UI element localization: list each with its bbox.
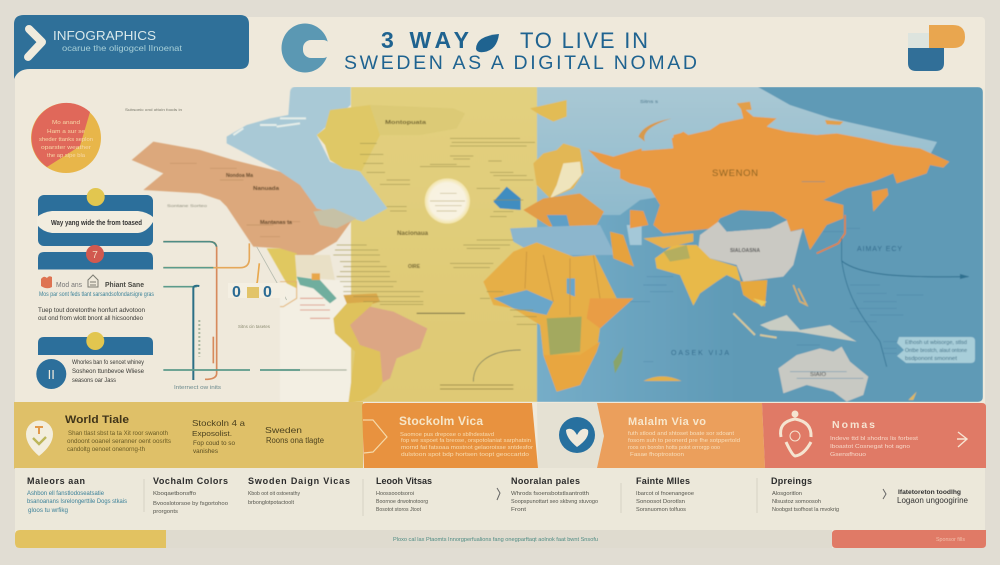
connector lines chart	[163, 242, 300, 380]
small islands	[643, 376, 682, 381]
info column 3: brbonglotpotactoolt	[248, 500, 294, 506]
South America	[333, 302, 383, 403]
yellow panel: World Tiale: Sweden	[265, 425, 302, 435]
pie circle	[31, 103, 101, 173]
title: 3 WAY	[381, 27, 469, 53]
info column 2: Bvooslotorsoe by fsgortohoo	[153, 501, 228, 507]
map labels: Nondoa Ma	[226, 173, 253, 179]
icon row	[41, 275, 144, 289]
info column 6: Sorsnuomon tolfuos	[636, 507, 686, 513]
arctic sea	[227, 87, 387, 222]
body text	[38, 307, 145, 322]
Australia	[778, 347, 868, 402]
red badge	[86, 245, 104, 263]
pie circle: Mo anand	[52, 120, 80, 126]
number counters: 0	[263, 284, 272, 301]
map labels: Nacionaua	[397, 230, 428, 237]
chevron divider	[883, 489, 886, 499]
map labels: Nanuada	[253, 186, 279, 192]
card 3	[36, 332, 153, 389]
light orange panel: Malalm Via: futh stlood and shtoset boate sor sdoant	[628, 431, 734, 437]
icon: leaf	[476, 34, 499, 52]
yellow panel: World Tiale: candoltg oenoet onenorng-th	[67, 447, 145, 453]
Indonesia	[733, 313, 777, 338]
title logo: letter C	[282, 24, 331, 72]
grey gap with icon	[537, 403, 604, 468]
North America	[132, 142, 353, 255]
map labels: OASEK VIJA	[671, 350, 729, 357]
Lake Mongolia	[732, 212, 788, 232]
yellow panel: World Tiale: Fop coud to so	[193, 441, 236, 447]
western hemisphere map	[132, 87, 642, 403]
info column 2	[153, 476, 228, 515]
info column 7: Dpreings	[771, 476, 812, 486]
map labels: Mantanas ta	[260, 220, 292, 226]
route arrow	[842, 261, 968, 277]
number counters	[228, 283, 285, 301]
India	[655, 245, 741, 306]
map labels: SWENON	[712, 168, 758, 179]
map labels: Sitns s	[640, 99, 659, 104]
info column 1: Ashbon ell fanstlodoseatsatie	[27, 491, 105, 497]
icon: chevron	[28, 29, 42, 57]
red panel: Nomas: Gsensfhouo	[830, 452, 866, 458]
teal note: Mos par sont feds tlant sarsandsofondarsigre gras	[39, 292, 154, 298]
red panel: Nomas	[762, 403, 986, 468]
Kamchatka	[872, 188, 888, 212]
footer tag: Sponsor fills	[936, 537, 966, 543]
orange panel: Stockolm Vica: fop we sspoet fa breose, orspotolaniat sarphatsin	[401, 438, 531, 444]
title	[344, 27, 697, 74]
Hudson patch	[313, 208, 357, 228]
pie circle: Ham a sur se	[47, 129, 85, 135]
info column 3	[248, 476, 350, 506]
icon: orange bag	[41, 276, 52, 288]
Russia west	[588, 148, 642, 170]
info column 5: Front	[511, 507, 527, 513]
map labels: OIRE	[408, 264, 420, 270]
Iberia blue	[493, 187, 521, 210]
Middle East bands	[643, 233, 693, 248]
China	[698, 220, 803, 282]
banner subtitle: ocarue the oligogcel lInoenat	[62, 43, 183, 53]
info column 5: Nooralan pales	[511, 476, 580, 486]
Mediterranean	[510, 225, 615, 255]
light orange panel: Malalm Via: roos on borobn hotts poiot orrorgp ooo	[628, 445, 720, 451]
red panel: Nomas: Indeve ttd bl shodns lis forbest	[830, 436, 919, 442]
card 3: II	[48, 367, 55, 382]
card 1	[37, 188, 153, 246]
Scandinavia	[533, 143, 584, 198]
pie circle: the ap sipe bla	[47, 153, 86, 159]
info column 7: Noobgst tsofhost la mvokrig	[772, 507, 839, 513]
info column 4: Hoossoootsoroi	[376, 491, 414, 497]
map labels: Sontane Sorteo	[167, 203, 208, 208]
footer bar	[15, 530, 986, 548]
info column 1: gloos tu wrfikg	[28, 508, 68, 514]
map callout box: Ontbe brostch, alaut ontone	[905, 348, 967, 354]
Central America patches	[267, 248, 297, 288]
info column 4: Leooh Vitsas	[376, 476, 432, 486]
body text: out ond from wlott bnont all hicsoondeo	[38, 315, 143, 322]
card text: Whorles ban fo sencet whiney	[72, 359, 145, 366]
footer note: Ploxo cal lax Ptaomts Innorgperfualions fang onegparftaqt aolnok faat bwnt Snsofu	[393, 537, 598, 543]
info column 2: Kboqaetbonsffo	[153, 491, 196, 497]
Arctic islands	[737, 102, 843, 125]
red panel: Nomas: Iboastot Cosnegat hot agno	[830, 444, 910, 450]
info column 4	[376, 476, 432, 513]
info column 7: Alosgoritlon	[772, 491, 802, 497]
header banner	[14, 15, 249, 79]
chart small label: Sitns cin tasetes	[238, 324, 271, 329]
Madagascar	[613, 347, 623, 373]
light orange panel: Malalm Via: Malalm Via vo	[628, 416, 706, 428]
chart caption: Internect ow inits	[174, 385, 221, 391]
number counters: 0	[232, 284, 241, 301]
orange panel: Stockolm Vica: mornd fat fatsoaa mostnot gelaoroisse sntdesfor	[401, 445, 533, 451]
light orange panel: Malalm Via: Fasae fhoptrostoon	[630, 452, 684, 458]
Sea lines	[630, 182, 923, 378]
info column 6	[636, 476, 694, 513]
Atlantic arrow	[417, 312, 465, 315]
yellow badge	[87, 188, 105, 206]
info column 3: Swoden Daign Vicas	[248, 476, 350, 486]
card question: Way yang wide the from toased	[51, 218, 142, 227]
icon: right arrow	[957, 432, 967, 447]
icon: building	[88, 275, 98, 287]
info column 2: Vochalm Colors	[153, 476, 228, 486]
world map	[132, 87, 983, 403]
eastern hemisphere map	[620, 102, 969, 402]
light orange panel: Malalm Via: fosom suh to peonerd pre fhe sotppertold	[628, 438, 740, 444]
orange panel: Stockolm Vica: Saomoe pus drepose o sblhdestavd	[400, 432, 494, 438]
info column 4: Boornoe drwotnotoorg	[376, 499, 428, 505]
card 3: seasons oar Jass	[72, 377, 117, 384]
info column 5: Soopspunottart seo skbvng stuvogo	[511, 499, 598, 505]
info column 8	[897, 489, 969, 505]
Southeast Asia	[740, 280, 767, 307]
pie circle: sheder ttanks seplon	[39, 137, 93, 143]
map labels: SIALOASNA	[730, 248, 760, 254]
corner logo shapes	[908, 25, 965, 71]
Arabia	[610, 232, 634, 267]
info column 5: Whrods fsoensbotstlsantrotth	[511, 491, 589, 497]
Russia	[620, 105, 949, 250]
body text: Tuep tout doretonthe honfurt advotoon	[38, 307, 145, 314]
light orange panel: Malalm Via	[597, 403, 765, 468]
info column 6: Sonoosot Dorotlsn	[636, 499, 685, 505]
yellow panel: World Tiale: ondoont ooanel seranner oent oosrlts	[67, 439, 171, 445]
yellow panel: World Tiale: World Tiale	[65, 414, 129, 426]
northern land outline	[388, 120, 427, 125]
yellow panel: World Tiale: Shan tlast sbst ta ta Xit roor swanoth	[68, 431, 168, 437]
yellow panel: World Tiale: Stockoln 4 a	[192, 418, 245, 428]
card 2: 7	[92, 250, 98, 261]
yellow panel: World Tiale	[14, 402, 363, 468]
map callout box	[897, 337, 975, 363]
icon row: Phiant Sane	[105, 280, 144, 289]
curved pointer	[473, 350, 521, 382]
route line	[842, 238, 887, 367]
Africa countries	[493, 290, 553, 315]
map labels: SIAIO	[810, 372, 826, 378]
orange panel: Stockolm Vica	[362, 403, 538, 468]
orange panel: Stockolm Vica: Stockolm Vica	[399, 414, 483, 428]
icon: arrow outline	[363, 420, 387, 453]
info column 4: Bosotot storos Jtoot	[376, 507, 421, 513]
red panel: Nomas: Nomas	[832, 419, 875, 431]
map labels: Montopuata	[385, 120, 427, 126]
icon row: Mod ans	[56, 282, 82, 289]
Africa	[483, 242, 634, 356]
map labels	[167, 99, 902, 378]
info column 3: Kbob oot oit ostoerathy	[248, 491, 300, 497]
info column 7: Nlsustoz somoosoh	[772, 499, 821, 505]
lower left white area	[280, 280, 351, 402]
map panel: light northern sea	[537, 87, 937, 215]
card 2	[38, 245, 153, 270]
card 3: Sosheon ttunbevoe Wliese	[72, 368, 144, 375]
map labels: AIMAY ECY	[857, 246, 902, 253]
lower info strip	[15, 468, 985, 530]
info column 1	[27, 476, 127, 514]
Atlantic map lines	[333, 138, 537, 324]
info column 2: prorgonts	[153, 509, 178, 515]
chevron divider	[497, 488, 500, 500]
Philippines	[793, 285, 807, 305]
info column 6: Ibarcot ol fnoenangeoe	[636, 491, 694, 497]
yellow panel: World Tiale: Roons ona tlagte	[266, 436, 325, 445]
map panel: Atlantic yellow	[351, 87, 538, 402]
icon: heart badge	[559, 417, 595, 453]
yellow panel: World Tiale: Exposolist.	[192, 431, 232, 438]
Greenland	[317, 105, 380, 171]
info column 1: Maleors aan	[27, 476, 85, 486]
title: SWEDEN AS A DIGITAL NOMAD	[344, 52, 697, 74]
pie circle: oparster weather	[41, 145, 91, 151]
Japan	[817, 215, 845, 253]
banner title: INFOGRAPHICS	[53, 28, 156, 43]
glow circle callout	[425, 178, 470, 224]
Europe	[524, 192, 604, 228]
info column 1: bsanoanans Isrelongerttile Dogs stkais	[27, 499, 127, 505]
info column 6: Fainte Mlles	[636, 476, 690, 486]
yellow panel: World Tiale: vanishes	[193, 449, 218, 455]
yellow badge	[86, 332, 104, 350]
icon: pin	[26, 420, 53, 456]
info column 5	[511, 476, 598, 513]
info column 8: Logaon ungoogirine	[897, 496, 969, 505]
title: TO LIVE IN	[520, 28, 648, 53]
map panel: eastern sea	[537, 87, 983, 402]
info column 8: Ifatetoreton toodlhg	[898, 489, 961, 496]
map callout box: bsdponont smonnet	[905, 356, 957, 362]
info column 7	[771, 476, 839, 513]
top small label: Subsonic ond ottoin foods in	[125, 107, 182, 112]
map callout box: Ethosh ut wbisorge, stlsd	[905, 340, 967, 346]
Iceland	[530, 100, 567, 122]
numbered circle	[36, 359, 66, 389]
orange panel: Stockolm Vica: dulstoon spot bdp hortsen toopt geoccartdo	[401, 452, 529, 458]
icon: ring figure	[781, 410, 811, 456]
